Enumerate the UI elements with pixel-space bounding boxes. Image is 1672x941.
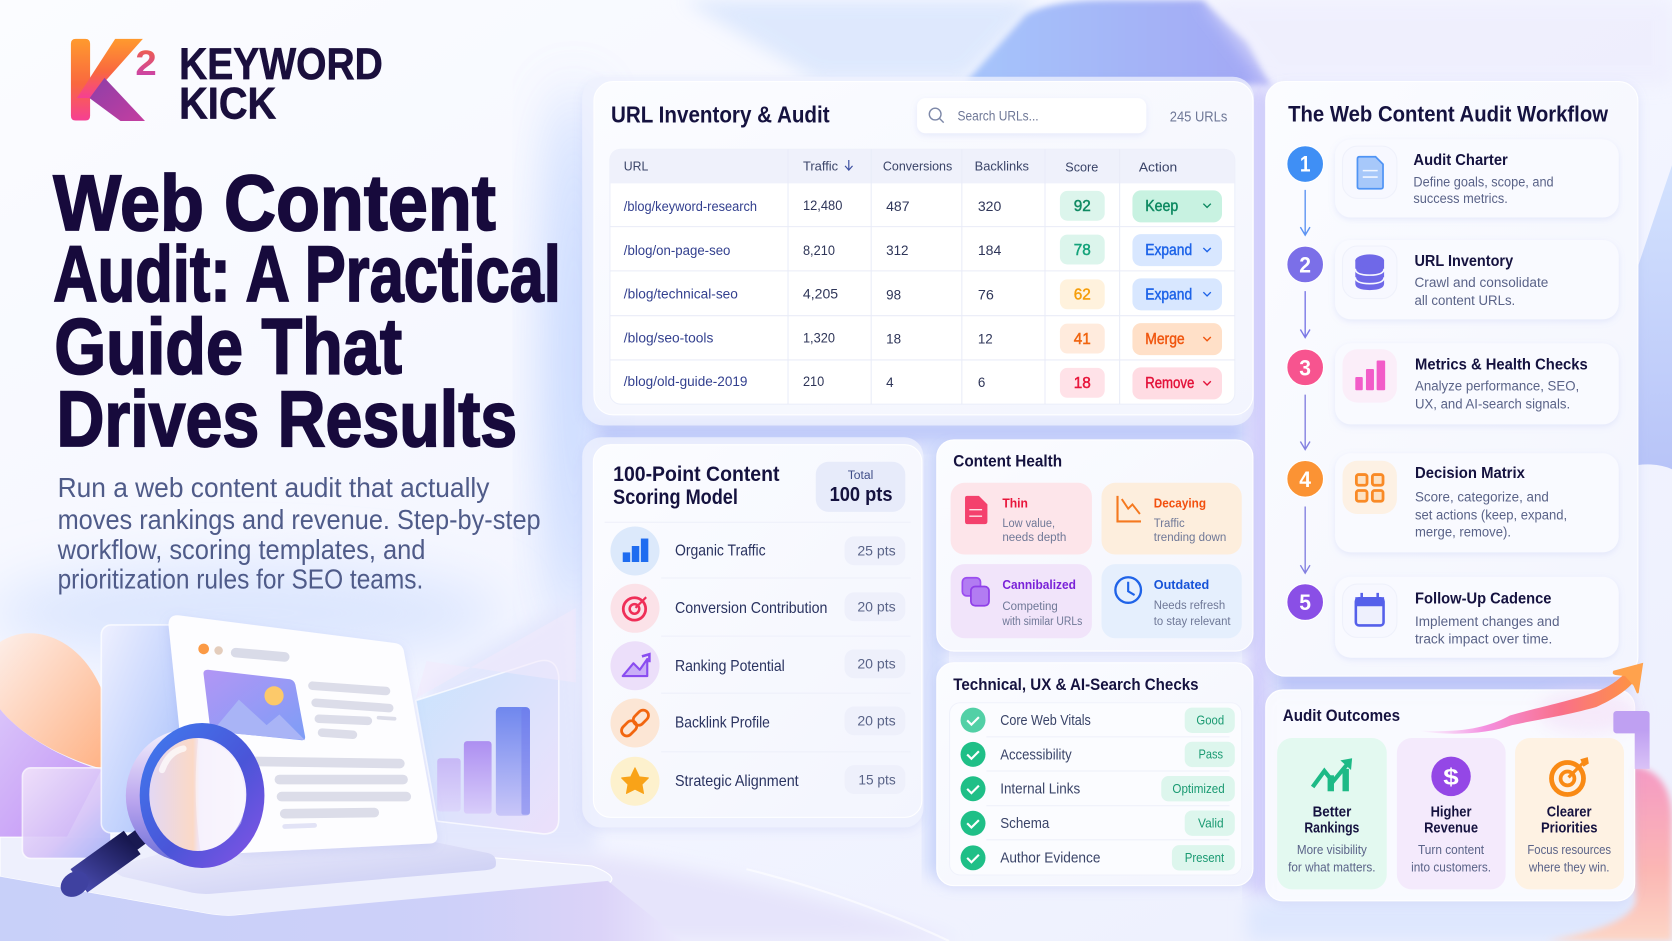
row: ranking potential: Ranking Potential [675, 658, 785, 675]
search box: Search URLs... [958, 108, 1039, 124]
card: better rankings: Better [1313, 803, 1352, 820]
card: higher revenue: Turn content [1418, 842, 1485, 857]
card: thin: needs depth [1002, 530, 1067, 544]
panel: audit outcomes [1266, 690, 1650, 901]
wordmark: KEYWORD [179, 39, 383, 89]
step 5: follow-up cadence: Follow-Up Cadence [1415, 590, 1552, 607]
row: technical SEO: 76 [978, 287, 994, 303]
audit table [610, 149, 1235, 404]
title: Web Content [53, 159, 496, 247]
row: ranking potential [610, 641, 905, 690]
row: keyword research: 487 [886, 198, 910, 214]
row: schema [961, 810, 1235, 836]
card: higher revenue: $ [1443, 764, 1459, 790]
card: better rankings [1277, 738, 1387, 889]
logo: Keyword Kick [71, 39, 383, 128]
total badge: Total [848, 468, 873, 482]
row: internal links [961, 776, 1235, 801]
row: conversion contribution [610, 584, 905, 633]
row: on-page SEO: 312 [886, 242, 909, 258]
row: author evidence [961, 845, 1235, 871]
card: thin [951, 483, 1092, 555]
row: technical SEO: /blog/technical-seo [624, 286, 738, 302]
row: SEO tools [624, 323, 1222, 355]
row: SEO tools: /blog/seo-tools [624, 329, 713, 345]
row: author evidence: Present [1185, 850, 1225, 865]
panel: web content audit workflow [1266, 82, 1638, 676]
row: technical SEO: Expand [1145, 287, 1192, 304]
row: schema: Valid [1198, 816, 1224, 831]
row: internal links: Internal Links [1000, 781, 1080, 797]
card: higher revenue: into customers. [1411, 859, 1491, 874]
row: backlink profile [610, 698, 905, 748]
card: outdated: to stay relevant [1154, 614, 1231, 628]
step 3: metrics and health checks: UX, and AI-search signals. [1415, 395, 1570, 411]
row: backlink profile: Backlink Profile [675, 714, 770, 731]
step 1: audit charter: success metrics. [1413, 190, 1508, 206]
step 2: URL inventory: all content URLs. [1414, 292, 1515, 308]
row: strategic alignment [610, 757, 905, 806]
step 2: URL inventory: 2 [1299, 252, 1311, 277]
step 1: audit charter: Define goals, scope, and [1413, 174, 1554, 190]
title: Drives Results [57, 375, 517, 463]
arrow: step 2 to 3 [1300, 291, 1310, 338]
row: on-page SEO: /blog/on-page-seo [624, 242, 731, 258]
step 1: audit charter [1287, 139, 1619, 218]
card: thin: Low value, [1002, 516, 1055, 530]
step 5: follow-up cadence: 5 [1299, 590, 1311, 615]
step 2: URL inventory: URL Inventory [1414, 253, 1513, 270]
heading: Technical, UX & AI-Search Checks [953, 675, 1199, 694]
step 5: follow-up cadence [1287, 577, 1619, 658]
step 4: decision matrix: Score, categorize, and [1415, 489, 1549, 505]
subtitle: workflow, scoring templates, and [57, 534, 425, 565]
wordmark: KICK [179, 78, 276, 128]
table header: Traffic [803, 159, 838, 174]
heading: Scoring Model [613, 486, 738, 509]
row: keyword research [624, 190, 1222, 222]
step 1: audit charter: Audit Charter [1413, 152, 1508, 169]
step 2: URL inventory [1287, 240, 1619, 319]
row: old guide 2019: 6 [978, 374, 986, 390]
row: conversion contribution: 20 pts [857, 599, 896, 615]
row: SEO tools: Merge [1145, 331, 1185, 348]
subtitle [57, 472, 541, 595]
row: SEO tools: 12 [978, 330, 993, 346]
illustration: audit scene with document and magnifier [0, 608, 682, 941]
card: outdated: Needs refresh [1154, 598, 1225, 612]
icon: magnifying glass [56, 723, 264, 902]
arrow: step 4 to 5 [1300, 507, 1310, 573]
step 4: decision matrix: Decision Matrix [1415, 465, 1525, 482]
row: technical SEO: 98 [886, 287, 901, 303]
row: old guide 2019: 210 [803, 373, 825, 389]
row: accessibility: Pass [1199, 747, 1223, 762]
row: backlink profile: 20 pts [857, 713, 896, 729]
row: on-page SEO: Expand [1145, 242, 1192, 259]
URL count: 245 URLs [1170, 109, 1227, 126]
card: better rankings: More visibility [1297, 842, 1367, 857]
table header: Backlinks [975, 159, 1029, 174]
row: old guide 2019: 18 [1074, 375, 1091, 392]
card: cannibalized: with similar URLs [1002, 614, 1082, 628]
row: SEO tools: 41 [1074, 331, 1091, 348]
card: outdated [1102, 564, 1242, 638]
title: Audit: A Practical [53, 230, 561, 318]
card: higher revenue [1397, 738, 1506, 889]
arrow: step 1 to 2 [1300, 190, 1310, 235]
chart bars [437, 707, 530, 816]
card: decaying [1102, 483, 1242, 555]
title: Guide That [54, 303, 402, 391]
arrow: step 3 to 4 [1300, 395, 1310, 449]
step 3: metrics and health checks [1287, 343, 1619, 424]
table header: Score [1065, 160, 1098, 175]
icon: K squared mark [71, 39, 157, 121]
step 4: decision matrix: 4 [1299, 467, 1312, 492]
row: keyword research: 12,480 [803, 197, 843, 213]
step 5: follow-up cadence: track impact over time. [1415, 630, 1552, 646]
wordmark [179, 39, 383, 128]
row: SEO tools: 18 [886, 330, 901, 346]
heading: Content Health [953, 452, 1062, 471]
arrow: growth swoosh [1420, 663, 1643, 734]
title [53, 159, 561, 463]
heading: 100-Point Content [613, 463, 780, 486]
card: decaying: Decaying [1154, 496, 1206, 511]
row: keyword research: /blog/keyword-research [624, 198, 757, 214]
search box [917, 98, 1146, 133]
card: cannibalized: Cannibalized [1002, 577, 1076, 592]
step 3: metrics and health checks: Analyze performance, SEO, [1415, 378, 1579, 394]
row: keyword research: Keep [1145, 198, 1178, 215]
card: cannibalized: Competing [1002, 599, 1058, 613]
step 4: decision matrix: merge, remove). [1415, 524, 1511, 540]
row: core web vitals [961, 708, 1235, 733]
card: clearer priorities [1515, 738, 1624, 889]
row: old guide 2019: 4 [886, 374, 894, 390]
heading [613, 463, 780, 509]
row: technical SEO [624, 278, 1222, 310]
card: clearer priorities: Clearer [1547, 803, 1592, 820]
table header: Conversions [883, 159, 953, 174]
row: old guide 2019: Remove [1145, 375, 1194, 392]
card: clearer priorities: Priorities [1541, 819, 1597, 836]
row: old guide 2019 [624, 367, 1222, 399]
card: better rankings: Rankings [1304, 819, 1359, 836]
card: decaying: Traffic [1154, 516, 1185, 530]
card: higher revenue: Higher [1431, 803, 1472, 820]
table header [624, 159, 1177, 175]
table header: URL [624, 159, 648, 174]
row: ranking potential: 20 pts [857, 656, 896, 672]
card: better rankings: for what matters. [1288, 859, 1376, 874]
panel: 100-point content scoring model [582, 437, 923, 828]
subtitle: Run a web content audit that actually [58, 472, 490, 503]
subtitle: moves rankings and revenue. Step-by-step [58, 504, 541, 535]
card: clearer priorities: where they win. [1528, 859, 1610, 874]
card: decaying: trending down [1154, 530, 1226, 544]
total badge: 100 pts [830, 484, 893, 506]
row: technical SEO: 4,205 [803, 286, 838, 302]
platform [116, 840, 496, 894]
row: SEO tools: 1,320 [803, 329, 835, 345]
step 4: decision matrix: set actions (keep, expand, [1415, 506, 1567, 522]
step 4: decision matrix [1287, 453, 1619, 552]
row: conversion contribution: Conversion Contribution [675, 600, 827, 617]
card: higher revenue: Revenue [1424, 819, 1478, 836]
step 1: audit charter: 1 [1300, 152, 1311, 177]
row: on-page SEO: 78 [1074, 242, 1091, 259]
row: strategic alignment: Strategic Alignment [675, 773, 799, 790]
card: thin: Thin [1002, 496, 1028, 511]
document page [168, 615, 437, 853]
card: clearer priorities: Focus resources [1527, 842, 1611, 857]
row: on-page SEO [624, 234, 1222, 266]
panel: content health [937, 440, 1253, 651]
row: core web vitals: Core Web Vitals [1000, 713, 1091, 729]
row: schema: Schema [1000, 816, 1049, 832]
row: organic traffic [610, 526, 905, 576]
step 3: metrics and health checks: Metrics & Health Checks [1415, 356, 1588, 373]
row: internal links: Optimized [1172, 781, 1225, 796]
heading: The Web Content Audit Workflow [1288, 102, 1609, 127]
row: organic traffic: Organic Traffic [675, 543, 766, 560]
row: keyword research: 92 [1074, 198, 1091, 215]
step 5: follow-up cadence: Implement changes and [1415, 613, 1560, 629]
step 2: URL inventory: Crawl and consolidate [1414, 274, 1549, 290]
row: strategic alignment: 15 pts [858, 771, 896, 787]
row: keyword research: 320 [978, 198, 1002, 214]
row: technical SEO: 62 [1074, 287, 1091, 304]
row: author evidence: Author Evidence [1000, 851, 1100, 867]
row: old guide 2019: /blog/old-guide-2019 [624, 373, 748, 389]
row: organic traffic: 25 pts [857, 543, 896, 559]
card: outdated: Outdated [1154, 577, 1209, 592]
card: cannibalized [951, 564, 1092, 638]
row: core web vitals: Good [1196, 713, 1224, 728]
heading: Audit Outcomes [1283, 706, 1400, 725]
row: accessibility [961, 742, 1235, 767]
total badge [816, 462, 905, 512]
row: accessibility: Accessibility [1000, 747, 1072, 763]
panel: technical, UX and AI-search checks [937, 663, 1253, 886]
icon: K squared mark: 2 [135, 44, 157, 83]
row: on-page SEO: 8,210 [803, 242, 835, 258]
step 3: metrics and health checks: 3 [1299, 355, 1311, 380]
heading: URL Inventory & Audit [611, 102, 830, 128]
subtitle: prioritization rules for SEO teams. [58, 564, 423, 595]
row: on-page SEO: 184 [978, 242, 1002, 258]
panel: URL inventory and audit [582, 77, 1254, 425]
table header: Action [1139, 160, 1177, 175]
